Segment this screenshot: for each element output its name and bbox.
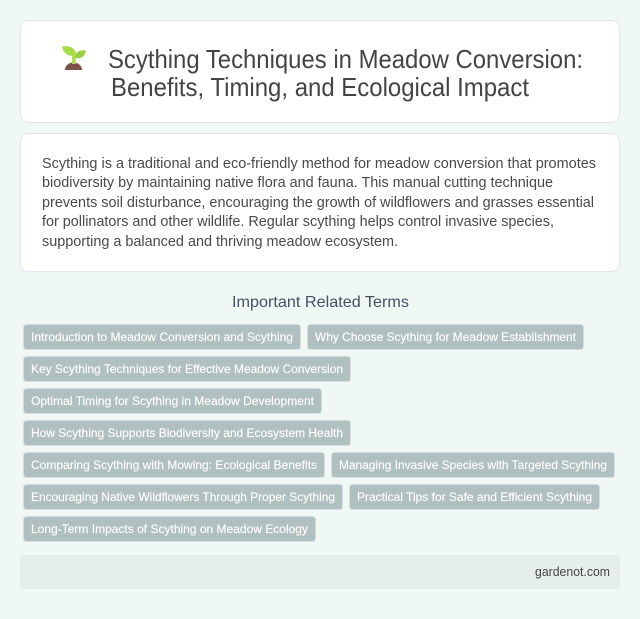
panel: description [20, 134, 620, 272]
text block: description: prevents soil disturbance, encouraging the growth of wildflowers and grasses essential [42, 195, 594, 211]
tag [350, 484, 600, 510]
tag [24, 452, 324, 478]
tag: Practical Tips for Safe and Efficient Scything [357, 490, 592, 504]
text block: description: for pollinators and other wildlife. Regular scything helps control invasive species, [42, 214, 554, 230]
text block: description: supporting a balanced and thriving meadow ecosystem. [42, 234, 398, 250]
tag: Managing Invasive Species with Targeted Scything [339, 458, 607, 472]
title: Scything Techniques in Meadow Conversion: [108, 46, 583, 74]
heading: important related terms: Important Related Terms [232, 294, 409, 311]
tag: How Scything Supports Biodiversity and Ecosystem Health [31, 426, 343, 440]
panel: header [20, 20, 620, 122]
text block: description: Scything is a traditional and eco-friendly method for meadow conversion that promotes [42, 156, 596, 172]
tag: Encouraging Native Wildflowers Through Proper Scything [31, 490, 335, 504]
icon: sprout [62, 46, 86, 70]
tag: Why Choose Scything for Meadow Establishment [315, 330, 577, 344]
text block: description: biodiversity by maintaining native flora and fauna. This manual cutting technique [42, 175, 553, 191]
tag [24, 484, 342, 510]
tag: Key Scything Techniques for Effective Meadow Conversion [31, 362, 343, 376]
tag [24, 420, 350, 446]
footer credit: gardenot.com [535, 564, 610, 579]
tag [24, 324, 300, 350]
tag [308, 324, 584, 350]
tag: Comparing Scything with Mowing: Ecological Benefits [31, 458, 317, 472]
tag list [24, 324, 614, 542]
tag [24, 516, 316, 542]
tag: Introduction to Meadow Conversion and Scything [31, 330, 293, 344]
tag [332, 452, 614, 478]
text block: description [42, 156, 596, 250]
footer [20, 555, 620, 589]
title [108, 46, 583, 102]
tag: Long-Term Impacts of Scything on Meadow Ecology [31, 522, 308, 536]
title: Benefits, Timing, and Ecological Impact [111, 74, 529, 102]
tag: Optimal Timing for Scything in Meadow Development [31, 394, 315, 408]
tag [24, 356, 350, 382]
tag [24, 388, 322, 414]
